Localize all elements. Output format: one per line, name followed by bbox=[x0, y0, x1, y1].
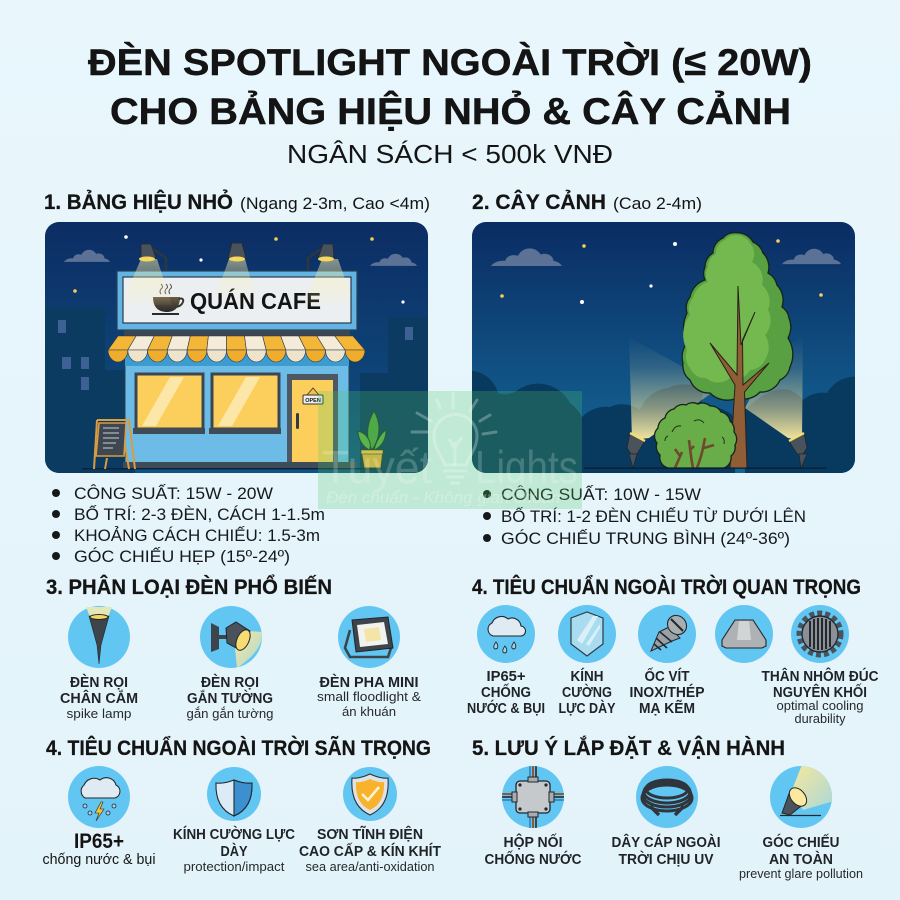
item: tempered glass bbox=[558, 605, 616, 717]
item: powder coating shield bbox=[299, 767, 441, 874]
list: tree specs: BỐ TRÍ: 1-2 ĐÈN CHIẾU TỪ DƯỚI LÊN bbox=[501, 506, 806, 526]
item: tempered glass shield: protection/impact bbox=[184, 859, 285, 874]
watermark: Đèn chuẩn - Không gian chuẩn bbox=[326, 488, 560, 507]
panel: shop illustration bbox=[45, 222, 428, 477]
shop body bbox=[125, 350, 349, 463]
sign board: QUÁN CAFE bbox=[190, 287, 321, 314]
item: wall lamp: gắn gắn tường bbox=[186, 706, 274, 721]
hills bbox=[465, 371, 860, 480]
item: junction box bbox=[484, 765, 582, 868]
item: die cast aluminium body: durability bbox=[794, 711, 846, 726]
list: tree specs bbox=[483, 485, 806, 548]
item: die cast aluminium body: optimal cooling bbox=[776, 698, 864, 713]
list: shop specs: GÓC CHIẾU HẸP (15º-24º) bbox=[74, 547, 290, 566]
item: powder coating shield: SƠN TĨNH ĐIỆN bbox=[317, 825, 423, 843]
item: screw: MẠ KẼM bbox=[639, 699, 695, 717]
item: tempered glass: CƯỜNG bbox=[562, 683, 612, 701]
chalkboard bbox=[94, 420, 135, 469]
city buildings bbox=[45, 307, 428, 477]
item: spike lamp bbox=[60, 606, 138, 721]
item: tempered glass: KÍNH bbox=[570, 668, 604, 685]
heading: lưu ý lắp đặt: 5. LƯU Ý LẮP ĐẶT & VẬN HÀNH bbox=[472, 736, 785, 760]
item: screw bbox=[630, 605, 705, 717]
potted plant bbox=[358, 411, 386, 468]
item: tempered glass shield: DÀY bbox=[220, 843, 248, 860]
item: die cast aluminium body: NGUYÊN KHỐI bbox=[773, 683, 867, 701]
item: spike lamp: CHÂN CẮM bbox=[60, 689, 138, 707]
item: powder coating shield: sea area/anti-oxidation bbox=[306, 859, 434, 874]
lamp beams bbox=[125, 259, 351, 305]
item: screw: INOX/THÉP bbox=[630, 684, 705, 701]
awning bbox=[108, 336, 365, 362]
item: spike lamp: ĐÈN RỌI bbox=[70, 674, 128, 691]
heading: cây cảnh: (Cao 2-4m) bbox=[613, 195, 702, 213]
item: spike lamp: spike lamp bbox=[66, 706, 132, 721]
item: mini floodlight: ĐÈN PHA MINI bbox=[320, 674, 418, 691]
title: ĐÈN SPOTLIGHT NGOÀI TRỜI (≤ 20W) bbox=[88, 41, 812, 83]
stars bbox=[500, 239, 823, 304]
item: die cast aluminium body bbox=[762, 605, 879, 726]
item: outdoor cable bbox=[612, 766, 720, 868]
sign board bbox=[117, 271, 357, 336]
item: safe beam angle: GÓC CHIẾU bbox=[762, 833, 840, 851]
heading: tiêu chuẩn sẵn trọng: 4. TIÊU CHUẨN NGOÀI TRỜI SÃN TRỌNG bbox=[46, 736, 431, 760]
heading: cây cảnh: 2. CÂY CẢNH bbox=[472, 190, 606, 214]
title bbox=[88, 41, 812, 169]
coffee cup bbox=[152, 284, 183, 315]
item: outdoor cable: DÂY CÁP NGOÀI bbox=[612, 833, 720, 851]
item: IP65 rain: IP65+ bbox=[486, 669, 526, 685]
item: wall lamp: ĐÈN RỌI bbox=[201, 674, 259, 691]
item: wall lamp bbox=[186, 606, 274, 721]
bush bbox=[655, 403, 737, 468]
item: safe beam angle: prevent glare pollution bbox=[739, 866, 863, 881]
icon: cone reflector bbox=[715, 605, 773, 663]
title: CHO BẢNG HIỆU NHỎ & CÂY CẢNH bbox=[110, 90, 791, 132]
list: shop specs: BỐ TRÍ: 2-3 ĐÈN, CÁCH 1-1.5m bbox=[74, 504, 325, 524]
item: IP65 storm bbox=[42, 766, 156, 868]
item: tempered glass shield bbox=[173, 767, 295, 874]
item: junction box: HỘP NỐI bbox=[504, 833, 562, 851]
list: shop specs: CÔNG SUẤT: 15W - 20W bbox=[74, 484, 273, 503]
ground line bbox=[584, 468, 826, 469]
shop windows bbox=[133, 374, 281, 434]
title: NGÂN SÁCH < 500k VNĐ bbox=[287, 139, 613, 169]
item: outdoor cable: TRỜI CHỊU UV bbox=[618, 850, 714, 868]
clouds bbox=[491, 248, 841, 266]
item: wall lamp: GẮN TƯỜNG bbox=[187, 689, 273, 707]
item: screw: ỐC VÍT bbox=[644, 667, 690, 685]
item: safe beam angle bbox=[739, 762, 863, 881]
item: junction box: CHỐNG NƯỚC bbox=[484, 850, 582, 868]
heading: tiêu chuẩn quan trọng: 4. TIÊU CHUẨN NGOÀI TRỜI QUAN TRỌNG bbox=[472, 575, 861, 599]
heading: cây cảnh bbox=[472, 190, 702, 214]
item: IP65 storm: IP65+ bbox=[74, 830, 124, 853]
panel: tree illustration bbox=[465, 222, 860, 480]
item: mini floodlight bbox=[317, 606, 421, 719]
light beams bbox=[629, 337, 803, 440]
list: shop specs bbox=[52, 484, 325, 566]
spot lamps bbox=[139, 243, 334, 270]
heading: bảng hiệu nhỏ: (Ngang 2-3m, Cao <4m) bbox=[240, 195, 430, 213]
tree bbox=[682, 233, 793, 468]
clouds bbox=[64, 250, 417, 266]
spike lamps bbox=[627, 433, 807, 468]
item: tempered glass shield: KÍNH CƯỜNG LỰC bbox=[173, 825, 295, 843]
item: IP65 rain: CHỐNG bbox=[481, 683, 531, 701]
heading: bảng hiệu nhỏ: 1. BẢNG HIỆU NHỎ bbox=[44, 190, 233, 214]
list: tree specs: GÓC CHIẾU TRUNG BÌNH (24º-36º) bbox=[501, 529, 790, 548]
item: safe beam angle: AN TOÀN bbox=[769, 851, 833, 868]
item: die cast aluminium body: THÂN NHÔM ĐÚC bbox=[762, 667, 879, 685]
watermark: Lights bbox=[475, 441, 578, 493]
building windows bbox=[58, 320, 413, 390]
door bbox=[287, 374, 338, 463]
item: IP65 storm: chống nước & bụi bbox=[42, 852, 156, 868]
item: mini floodlight: small floodlight & bbox=[317, 689, 421, 704]
list: shop specs: KHOẢNG CÁCH CHIẾU: 1.5-3m bbox=[74, 526, 320, 545]
item: IP65 rain: NƯỚC & BỤI bbox=[467, 699, 545, 717]
shop step bbox=[123, 462, 357, 468]
item: powder coating shield: CAO CẤP & KÍN KHÍT bbox=[299, 843, 441, 860]
item: IP65 rain bbox=[467, 605, 545, 717]
watermark bbox=[318, 391, 582, 509]
list: tree specs: CÔNG SUẤT: 10W - 15W bbox=[501, 485, 701, 504]
item: mini floodlight: án khuán bbox=[342, 704, 396, 719]
stars bbox=[73, 235, 405, 304]
door: OPEN bbox=[305, 398, 321, 404]
heading: bảng hiệu nhỏ bbox=[44, 190, 430, 214]
heading: phân loại: 3. PHÂN LOẠI ĐÈN PHỔ BIẾN bbox=[46, 575, 332, 599]
item: tempered glass: LỰC DÀY bbox=[558, 700, 616, 717]
watermark: Tuyết bbox=[322, 441, 432, 493]
